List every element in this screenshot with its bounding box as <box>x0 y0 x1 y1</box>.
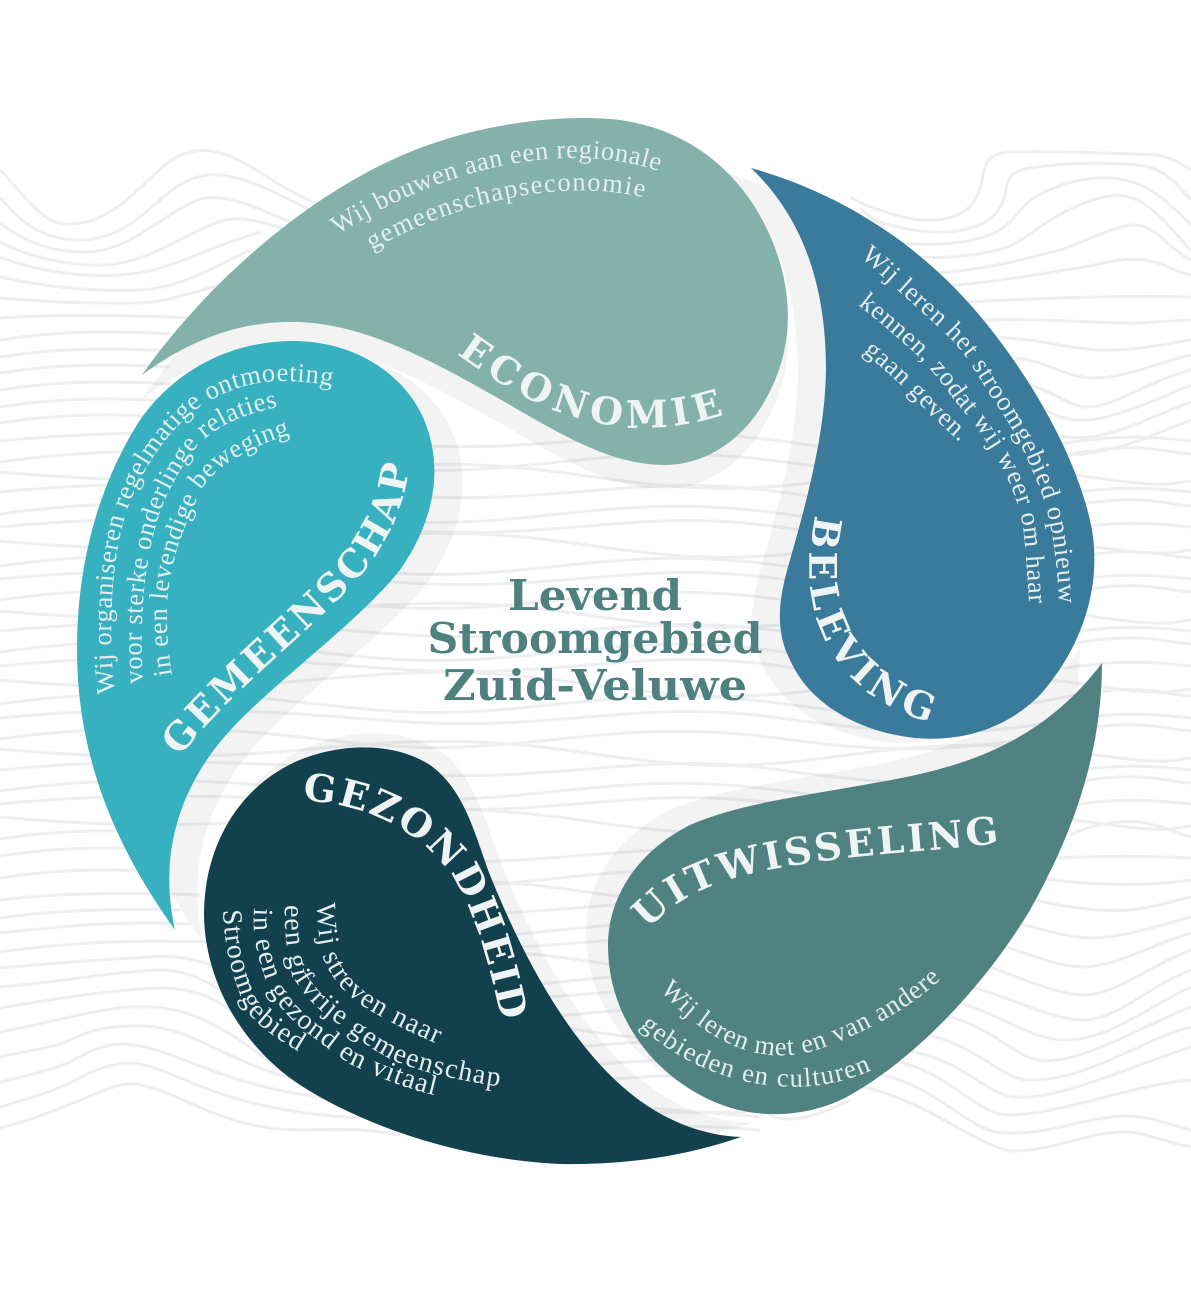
description: Gezondheid: een gifvrije gemeenschap <box>283 906 500 1092</box>
description: Gemeenschap: voor sterke onderlinge relaties <box>126 396 276 684</box>
description: Uitwisseling: Wij leren met en van andere <box>664 972 940 1056</box>
background: flowing contour lines <box>0 151 1191 1151</box>
description: Economie: Wij bouwen aan een regionale <box>328 141 660 232</box>
description: Gezondheid: Stroomgebied <box>223 911 307 1052</box>
title: Stroomgebied <box>428 614 762 663</box>
soft shadows behind the drops <box>105 142 1080 1150</box>
title <box>428 571 762 710</box>
drop: Gemeenschap <box>77 341 434 930</box>
description: Uitwisseling: gebieden en culturen <box>638 1019 872 1087</box>
label: Beleving: BELEVING <box>809 516 935 720</box>
drop: Uitwisseling <box>608 663 1102 1114</box>
description: Gezondheid: Wij streven naar <box>314 902 442 1043</box>
drop: Beleving <box>751 168 1094 739</box>
description: Beleving: Wij leren het stroomgebied opnieuw <box>865 244 1072 603</box>
description: Beleving: kennen, zodat wij weer om haar <box>858 290 1044 603</box>
label: Uitwisseling: UITWISSELING <box>630 816 996 922</box>
drop: Economie <box>142 118 788 465</box>
description: Uitwisseling <box>638 972 940 1087</box>
description: Gemeenschap: in een levendige beweging <box>149 422 290 676</box>
drop: Gezondheid <box>204 747 741 1164</box>
title: Zuid-Veluwe <box>443 661 747 710</box>
label: Gezondheid: GEZONDHEID <box>306 774 526 1016</box>
description: Gemeenschap: Wij organiseren regelmatige ontmoeting <box>94 364 333 695</box>
label: Gemeenschap: GEMEENSCHAP <box>164 462 408 750</box>
label: Economie: ECONOMIE <box>458 332 722 428</box>
description: Economie: gemeenschapseconomie <box>368 176 645 254</box>
title: Levend <box>508 571 682 620</box>
description: Gezondheid: in een gezond en vitaal <box>254 908 436 1095</box>
description: Beleving: gaan geven. <box>861 344 961 441</box>
